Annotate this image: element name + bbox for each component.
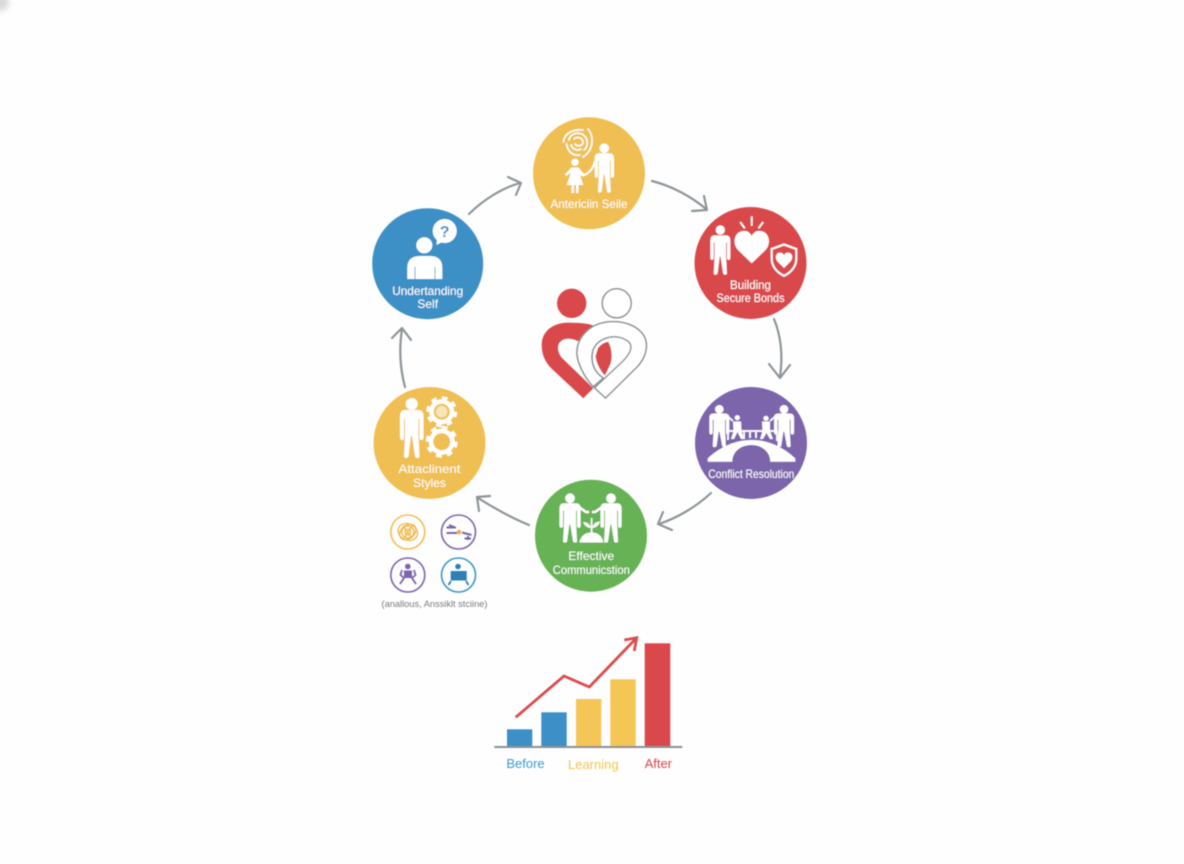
node: Effective Communication bbox=[535, 480, 647, 592]
icon: person and gears bbox=[400, 398, 456, 458]
node: Anterisilin Seile bbox=[533, 117, 645, 229]
icon: person with question bubble: ? bbox=[440, 224, 450, 241]
axis labels: Learning bbox=[568, 757, 619, 772]
icon detail: reaching arms bbox=[576, 505, 605, 512]
icon: swirl above adult and child bbox=[564, 129, 614, 193]
node: Attachment Styles bbox=[374, 387, 486, 499]
bar chart: before, learning, after bbox=[494, 638, 682, 772]
label: Understanding Self: Undertanding bbox=[392, 284, 463, 298]
icon: anxious swirl bbox=[391, 515, 425, 549]
icon detail: arms and bridge rail bbox=[726, 415, 777, 441]
emblem: grey outlined heart bbox=[577, 322, 646, 398]
arrow: attachment styles to understanding self bbox=[392, 328, 411, 387]
node: Conflict Resolution bbox=[695, 387, 807, 499]
arrow: understanding self to top node bbox=[469, 177, 521, 214]
axis labels bbox=[506, 756, 673, 772]
arrow: top node to secure bonds bbox=[652, 181, 707, 211]
label: Attachment Styles: Attaclinent bbox=[398, 462, 461, 476]
label: Building Secure Bonds: Building bbox=[730, 280, 771, 292]
label: Effective Communication: Communicstion bbox=[553, 563, 630, 577]
emblem: red inner crescent bbox=[596, 342, 612, 376]
axis labels: After bbox=[645, 756, 673, 771]
label: Building Secure Bonds: Secure Bonds bbox=[716, 293, 785, 305]
icon: two people growing a plant bbox=[559, 493, 622, 543]
attachment style mini icons bbox=[391, 515, 476, 592]
icon: person, heart and shield bbox=[710, 217, 796, 276]
icon: secure figure bbox=[442, 558, 476, 592]
label: Effective Communication: Effective bbox=[568, 549, 615, 563]
bars bbox=[507, 643, 670, 747]
axis labels: Before bbox=[506, 756, 545, 771]
label: Anterisilin Seile: Antericiin Seile bbox=[550, 197, 628, 211]
trend arrow bbox=[516, 638, 637, 717]
icon: avoidant lines bbox=[442, 515, 476, 549]
caption: attachment style names: (anallous, Anssiklt stciine) bbox=[382, 599, 488, 610]
label: Attachment Styles: Styles bbox=[413, 476, 446, 490]
arrow: conflict resolution to communication bbox=[658, 493, 711, 530]
arrows between nodes bbox=[392, 177, 790, 530]
label: Conflict Resolution: Conflict Resolution bbox=[708, 467, 794, 481]
emblem: red ribbon heart bbox=[542, 323, 600, 398]
icon: adults and children on a bridge bbox=[708, 405, 795, 462]
center emblem: two people forming a heart bbox=[542, 289, 646, 398]
icon: seated figure bbox=[391, 558, 425, 592]
node: Building Secure Bonds bbox=[694, 207, 806, 319]
node: Understanding Self bbox=[372, 208, 483, 319]
arrow: secure bonds to conflict resolution bbox=[769, 319, 790, 378]
arrow: communication to attachment styles bbox=[477, 496, 529, 525]
label: Understanding Self: Self bbox=[417, 297, 439, 311]
